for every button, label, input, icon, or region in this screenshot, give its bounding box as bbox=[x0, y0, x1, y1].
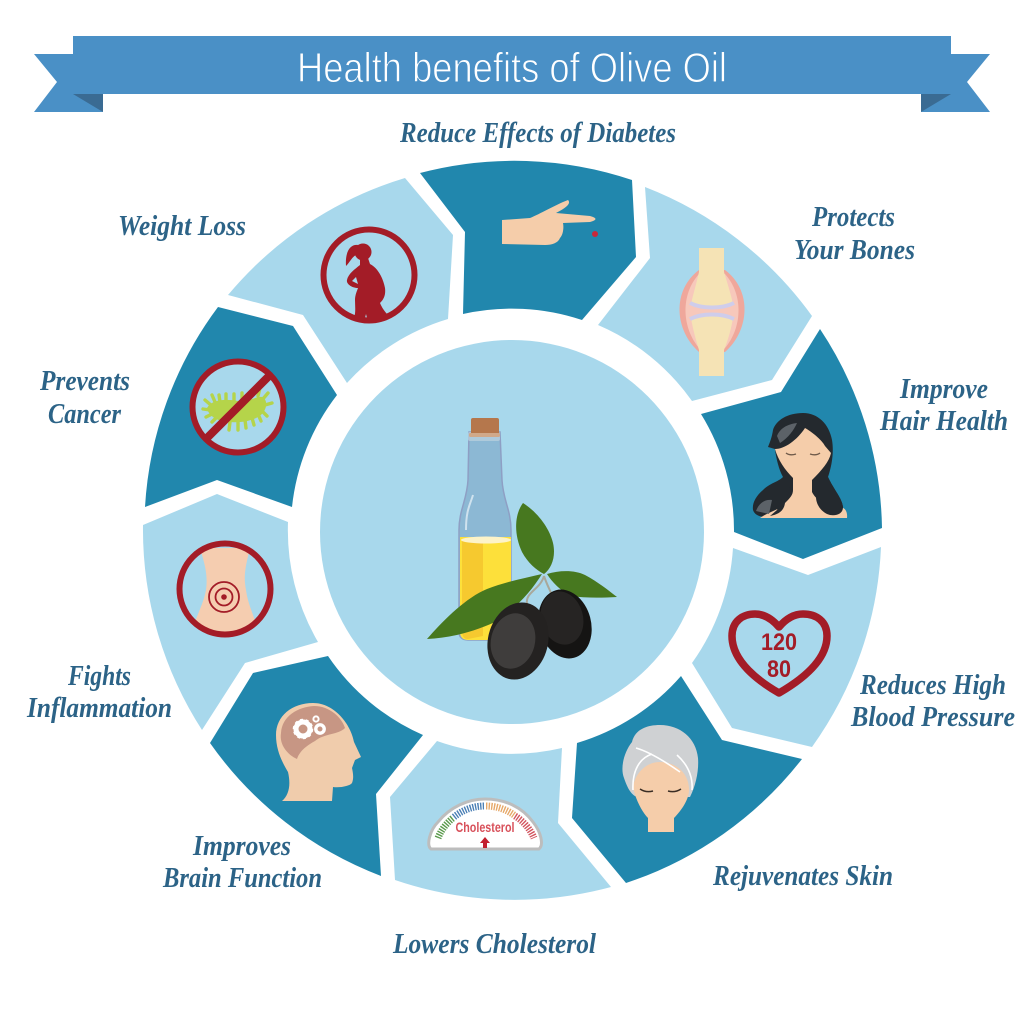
panel: improve hair health bbox=[701, 329, 1008, 559]
panel: reduces high blood pressure bbox=[692, 547, 1015, 747]
icon: crossed out bacterium bbox=[192, 362, 284, 452]
segment bbox=[228, 178, 453, 383]
label: Blood Pressure bbox=[850, 702, 1015, 733]
label: Improve bbox=[899, 374, 988, 405]
label: Weight Loss bbox=[118, 211, 246, 242]
icon: hand with blood drop bbox=[502, 200, 598, 245]
panel: weight loss bbox=[118, 178, 453, 383]
title text: Health benefits of Olive Oil bbox=[297, 44, 727, 91]
label: Inflammation bbox=[26, 693, 172, 724]
label: Your Bones bbox=[794, 235, 915, 266]
icon: heart with blood pressure bbox=[732, 614, 827, 693]
icon: olive branch bbox=[427, 503, 617, 639]
segment bbox=[143, 494, 318, 730]
ribbon folds bbox=[73, 94, 951, 112]
icon: heart with blood pressure: 120 bbox=[761, 629, 797, 656]
icon: heart with blood pressure: 80 bbox=[767, 656, 791, 683]
ribbon body bbox=[73, 36, 951, 94]
segment bbox=[210, 656, 423, 876]
panel: rejuvenates skin bbox=[572, 676, 893, 892]
segment bbox=[572, 676, 802, 883]
segment bbox=[701, 329, 882, 559]
label bbox=[794, 202, 915, 266]
icon: woman with dark hair bbox=[753, 413, 847, 518]
panel: centre circle with olive oil bbox=[320, 340, 704, 724]
icon: cholesterol gauge: Cholesterol bbox=[456, 820, 514, 835]
panel: improves brain function bbox=[162, 656, 423, 894]
label bbox=[850, 670, 1015, 733]
segment bbox=[692, 547, 881, 747]
label bbox=[879, 374, 1008, 437]
label: Hair Health bbox=[879, 406, 1008, 437]
label bbox=[26, 661, 172, 724]
label: Lowers Cholesterol bbox=[392, 929, 596, 960]
icon: black olives bbox=[479, 583, 599, 686]
label: Reduces High bbox=[859, 670, 1006, 701]
icon: cholesterol gauge bbox=[429, 799, 541, 849]
label: Cancer bbox=[48, 399, 122, 430]
centre circle bbox=[320, 340, 704, 724]
segment bbox=[145, 307, 337, 507]
panel: protects your bones bbox=[598, 187, 915, 401]
label: Fights bbox=[67, 661, 131, 692]
label: Reduce Effects of Diabetes bbox=[399, 118, 676, 149]
panel: lowers cholesterol bbox=[390, 741, 611, 960]
icon: abdomen with target bbox=[180, 544, 270, 634]
ribbon tails bbox=[34, 54, 990, 112]
title banner bbox=[34, 36, 990, 112]
label bbox=[162, 831, 322, 894]
icon: head with brain and gears bbox=[276, 703, 361, 801]
segment bbox=[420, 161, 636, 320]
icon: older woman with grey hair bbox=[622, 725, 698, 832]
segment bbox=[390, 741, 611, 900]
panel: fights inflammation bbox=[26, 494, 318, 730]
label: Prevents bbox=[39, 366, 130, 397]
segment bbox=[598, 187, 812, 401]
label: Improves bbox=[192, 831, 291, 862]
icon: olive oil bottle bbox=[459, 418, 511, 640]
label bbox=[39, 366, 130, 430]
label: Rejuvenates Skin bbox=[712, 861, 893, 892]
icon: overweight silhouette bbox=[324, 230, 414, 322]
panel: prevents cancer bbox=[39, 307, 337, 507]
panel: reduce effects of diabetes bbox=[399, 118, 676, 320]
label: Protects bbox=[811, 202, 895, 233]
icon: joint bbox=[679, 248, 745, 376]
label: Brain Function bbox=[162, 863, 322, 894]
